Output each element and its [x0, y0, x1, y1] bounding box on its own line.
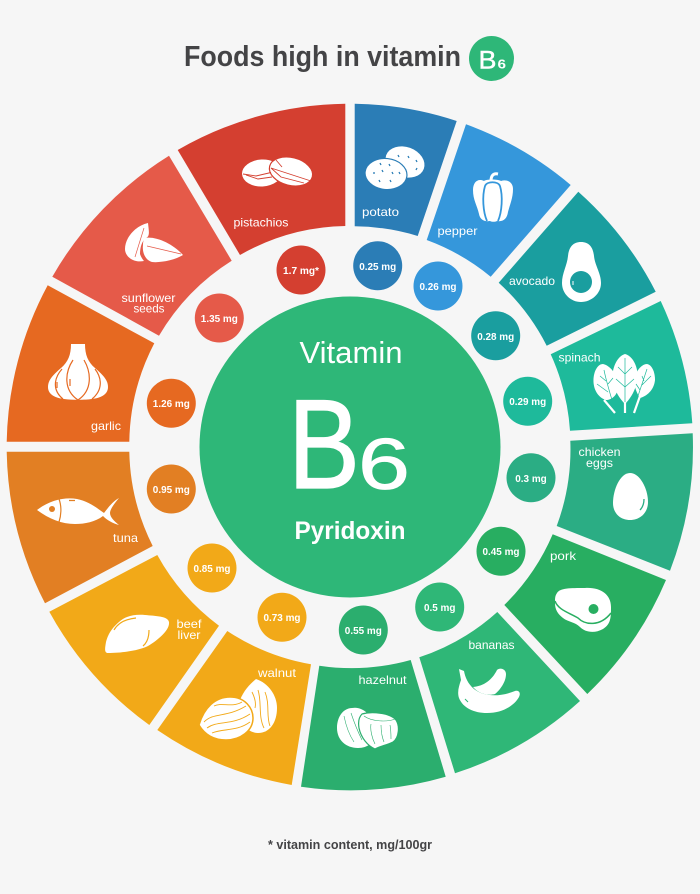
label: pepper: pepper [438, 224, 478, 238]
title badge: B6: 6 [498, 56, 506, 72]
value: 0.45 mg [476, 527, 526, 576]
title text: Foods high in vitamin [184, 41, 461, 73]
value: 0.73 mg [258, 593, 306, 642]
label: tuna: tuna [113, 531, 138, 545]
value: 0.85 mg [188, 544, 236, 592]
label: avocado: avocado [509, 274, 555, 288]
label: sunflower seeds [122, 291, 176, 316]
icon: hazelnut [337, 708, 398, 749]
value: 0.85 mg: 0.85 mg [194, 563, 230, 575]
label: beef liver [176, 617, 202, 642]
value: 1.7 mg [276, 246, 326, 294]
label: bananas: bananas [468, 638, 514, 652]
icon: egg [613, 473, 648, 520]
label: chicken eggs: chicken [578, 445, 620, 459]
value: 1.26 mg: 1.26 mg [153, 398, 190, 410]
label: beef liver: liver [178, 628, 200, 642]
label: walnut: walnut [257, 666, 297, 680]
center circle: Vitamin B6 Pyridoxin [200, 296, 500, 598]
value: 1.35 mg [195, 294, 244, 342]
value: 0.29 mg [503, 377, 552, 426]
title [184, 36, 514, 81]
icon: pork steak [555, 588, 611, 632]
panel: chicken eggs [557, 433, 693, 571]
label: spinach: spinach [558, 350, 600, 364]
footnote: * vitamin content, mg/100gr [268, 838, 432, 852]
title badge: B6 [469, 36, 514, 81]
label: garlic: garlic [91, 419, 121, 433]
value: 0.29 mg: 0.29 mg [509, 396, 546, 408]
label: pistachios: pistachios [234, 216, 288, 230]
value: 0.95 mg: 0.95 mg [153, 484, 190, 496]
panel: pork [504, 534, 666, 694]
label: potato: potato [362, 205, 399, 219]
value: 0.3 mg: 0.3 mg [515, 473, 547, 485]
panel: walnut [157, 631, 311, 785]
icon: potato [363, 141, 429, 192]
panel: pistachios [178, 104, 345, 255]
label: hazelnut: hazelnut [358, 673, 407, 687]
center circle: Vitamin B6 Pyridoxin: Vitamin [300, 335, 402, 370]
label: sunflower seeds: seeds [134, 302, 164, 316]
icon: sunflower seeds [125, 223, 183, 262]
value: 0.45 mg: 0.45 mg [482, 546, 520, 558]
label: chicken eggs: eggs [586, 456, 613, 470]
value: 0.3 mg [506, 453, 556, 502]
icon: bananas [458, 669, 520, 713]
value: 0.25 mg: 0.25 mg [359, 261, 396, 273]
value: 0.28 mg [471, 311, 520, 360]
label: sunflower seeds: sunflower [122, 291, 176, 305]
value: 0.25 mg [353, 241, 402, 290]
label: beef liver: beef [176, 617, 202, 631]
label: chicken eggs [578, 445, 620, 470]
value: 0.26 mg: 0.26 mg [420, 281, 456, 293]
panel: hazelnut [301, 660, 446, 790]
panel: spinach [551, 301, 692, 431]
panel: pepper [427, 124, 571, 277]
title badge: B6: B [478, 46, 496, 74]
panel: potato [355, 104, 457, 236]
value: 0.55 mg [339, 606, 388, 654]
value: 0.26 mg [414, 262, 462, 310]
center circle: Vitamin B6 Pyridoxin: Pyridoxin [294, 517, 406, 545]
icon: pistachios [241, 153, 316, 190]
value: 0.55 mg: 0.55 mg [345, 625, 382, 637]
panel: sunflower seeds [52, 156, 232, 336]
center circle: Vitamin B6 Pyridoxin: B [288, 373, 360, 515]
label: pork: pork [550, 549, 577, 563]
value: 0.5 mg: 0.5 mg [424, 602, 455, 614]
panel: avocado [499, 192, 656, 346]
icon: avocado [562, 242, 601, 302]
icon: garlic [48, 344, 108, 400]
icon: spinach [593, 354, 655, 413]
panel: bananas [419, 612, 580, 773]
panel: beef liver [49, 555, 219, 725]
value: 1.26 mg [147, 379, 196, 428]
value: 0.73 mg: 0.73 mg [264, 612, 300, 624]
value: 0.95 mg [147, 464, 196, 514]
value: 0.5 mg [415, 582, 464, 632]
value: 1.35 mg: 1.35 mg [201, 313, 238, 325]
panel: tuna [7, 452, 153, 603]
icon: beef liver [105, 615, 169, 653]
icon: fish [37, 498, 119, 525]
panel: garlic [7, 285, 154, 442]
value: 0.28 mg: 0.28 mg [477, 331, 514, 343]
value: 1.7 mg: 1.7 mg* [283, 265, 320, 277]
icon: walnut [199, 679, 277, 740]
center circle: Vitamin B6 Pyridoxin: 6 [358, 425, 410, 505]
icon: pepper [473, 174, 513, 222]
